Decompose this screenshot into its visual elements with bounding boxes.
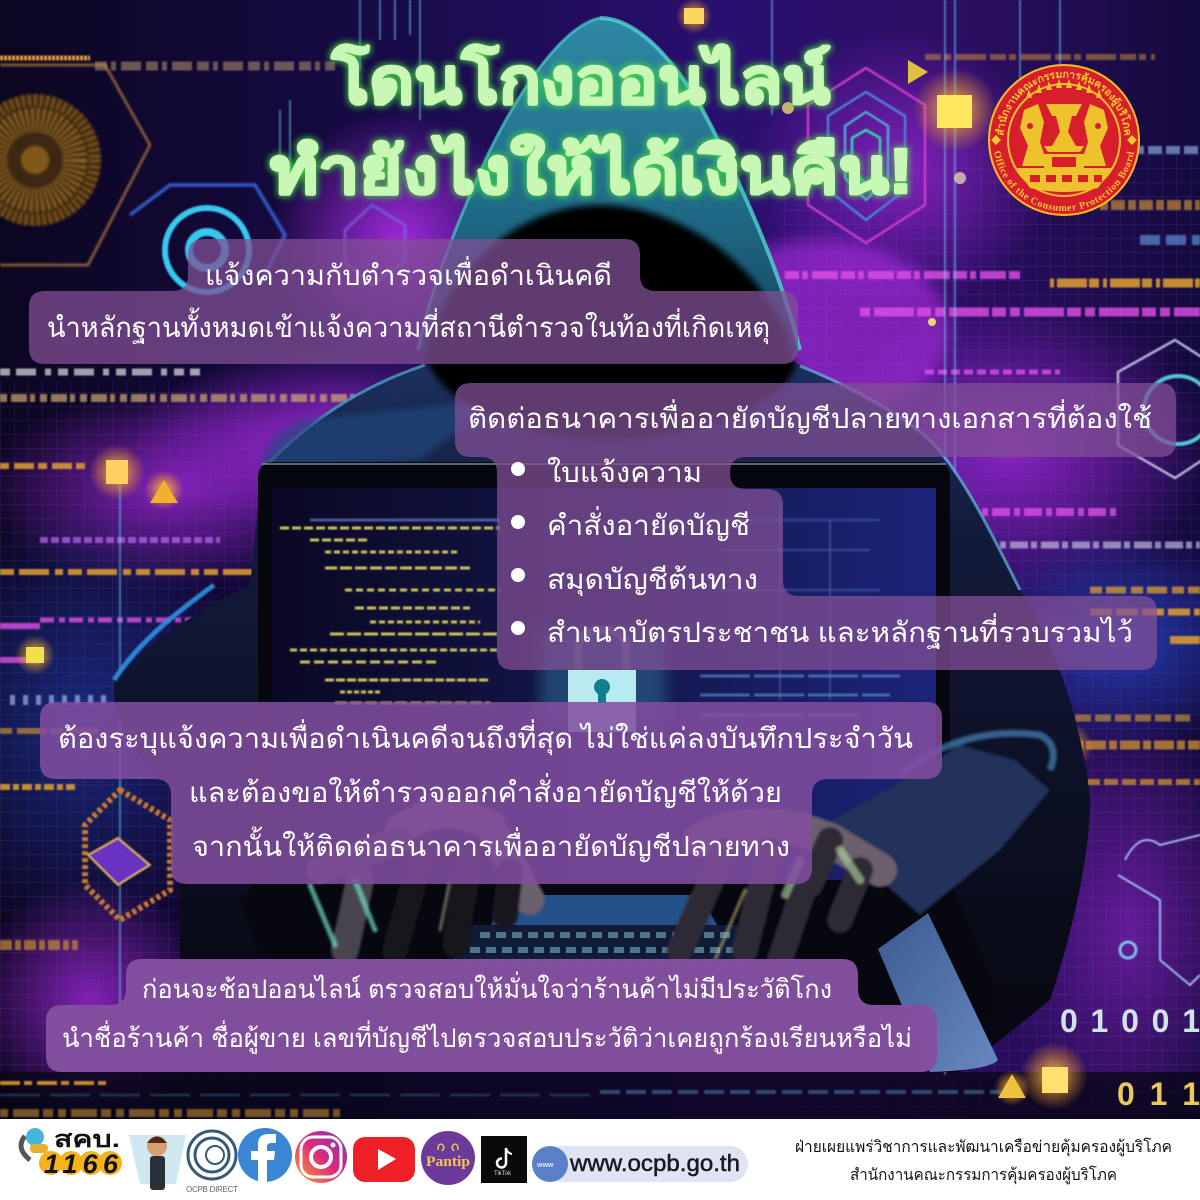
binary digits: 0 1 1 [1117,1076,1200,1112]
text: police report heading and evidence: นำหลักฐานทั้งหมดเข้าแจ้งความที่สถานีตำรวจในท้องที่เกิดเหตุ [47,307,770,345]
website link: www.ocpb.go.th [569,1150,740,1176]
footer band [0,1119,1200,1200]
icon: Pantip: Pantip [426,1154,470,1170]
panel: check before buying [46,959,937,1072]
list: required documents [511,456,1133,649]
text: check seller [62,971,912,1054]
small gold hexagon with diamond [85,790,170,920]
icon: TikTok: TikTok [494,1171,512,1177]
icon: Instagram [295,1131,347,1183]
icon: hotline 1166: สคบ. [54,1126,120,1152]
text: bank heading: ติดต่อธนาคารเพื่ออายัดบัญชีปลายทางเอกสารที่ต้องใช้ [468,399,1152,434]
text: check seller: ก่อนจะช้อปออนไลน์ ตรวจสอบให้มั่นใจว่าร้านค้าไม่มีประวัติโกง [142,971,832,1004]
text: case instructions [58,719,913,862]
icon: Facebook [238,1128,292,1182]
list: required documents: คำสั่งอายัดบัญชี [547,506,750,541]
text: agency credit: สำนักงานคณะกรรมการคุ้มครองผู้บริโภค [850,1165,1117,1185]
list: required documents: สำเนาบัตรประชาชน และหลักฐานที่รวบรวมไว้ [547,613,1133,649]
title: โดนโกงออนไลน์ [331,43,831,117]
logo: Office of the Consumer Protection Board: สำนักงานคณะกรรมการคุ้มครองผู้บริโภค [995,72,1132,136]
hands [310,733,1053,960]
website link: www [536,1162,554,1169]
icon: hotline 1166: 1166 [44,1149,119,1179]
laptop [240,462,1000,1072]
logo: Office of the Consumer Protection Board [988,64,1140,216]
icon: YouTube [353,1137,415,1182]
text: agency credit [795,1137,1172,1185]
lock icon [540,630,665,732]
panel: report to police [29,239,798,364]
text: agency credit: ฝ่ายเผยแพร่วิชาการและพัฒนาเครือข่ายคุ้มครองผู้บริโภค [795,1137,1172,1157]
icon: mascot [129,1135,186,1190]
blue ring [165,208,249,292]
logo: Office of the Consumer Protection Board: Office of the Consumer Protection Board [994,151,1134,211]
text: police report heading and evidence: แจ้งความกับตำรวจเพื่อดำเนินคดี [205,256,612,291]
text: police report heading and evidence [47,256,770,345]
list: required documents: สมุดบัญชีต้นทาง [547,564,758,597]
text: case instructions: ต้องระบุแจ้งความเพื่อดำเนินคดีจนถึงที่สุด ไม่ใช่แค่ลงบันทึกประจำวัน [58,719,913,756]
panel: contact the bank and documents [455,383,1176,670]
website link [532,1146,748,1182]
text: case instructions: จากนั้นให้ติดต่อธนาคารเพื่ออายัดบัญชีปลายทาง [192,826,790,862]
binary digits: 0 1 0 0 1 [1060,1003,1200,1039]
text: check seller: นำชื่อร้านค้า ชื่อผู้ขาย เลขที่บัญชีไปตรวจสอบประวัติว่าเคยถูกร้องเรียนหรือไม่ [62,1020,912,1054]
icon: hotline 1166 [21,1126,122,1179]
binary digits [1060,1003,1200,1112]
body and shoulders [114,360,1090,1072]
hood [418,18,800,372]
icon: Pantip [421,1131,475,1185]
right sleeve [815,745,1050,915]
icon: OCPB Direct: OCPB DIRECT [186,1185,238,1194]
right hexagons [808,68,1200,985]
list: required documents: ใบแจ้งความ [547,456,702,488]
icon: OCPB Direct [186,1131,238,1194]
icon: TikTok [481,1136,527,1183]
panel: file a case to the end [40,702,942,884]
left hexagon with globe [0,65,405,285]
keyboard deck [240,880,1000,1072]
title [270,43,913,207]
right hand [680,825,880,960]
title: ทำยังไงให้ได้เงินคืน! [270,134,913,207]
left hand [310,814,530,950]
text: case instructions: และต้องขอให้ตำรวจออกคำสั่งอายัดบัญชีให้ด้วย [189,773,782,808]
hooded figure [114,18,1090,1072]
